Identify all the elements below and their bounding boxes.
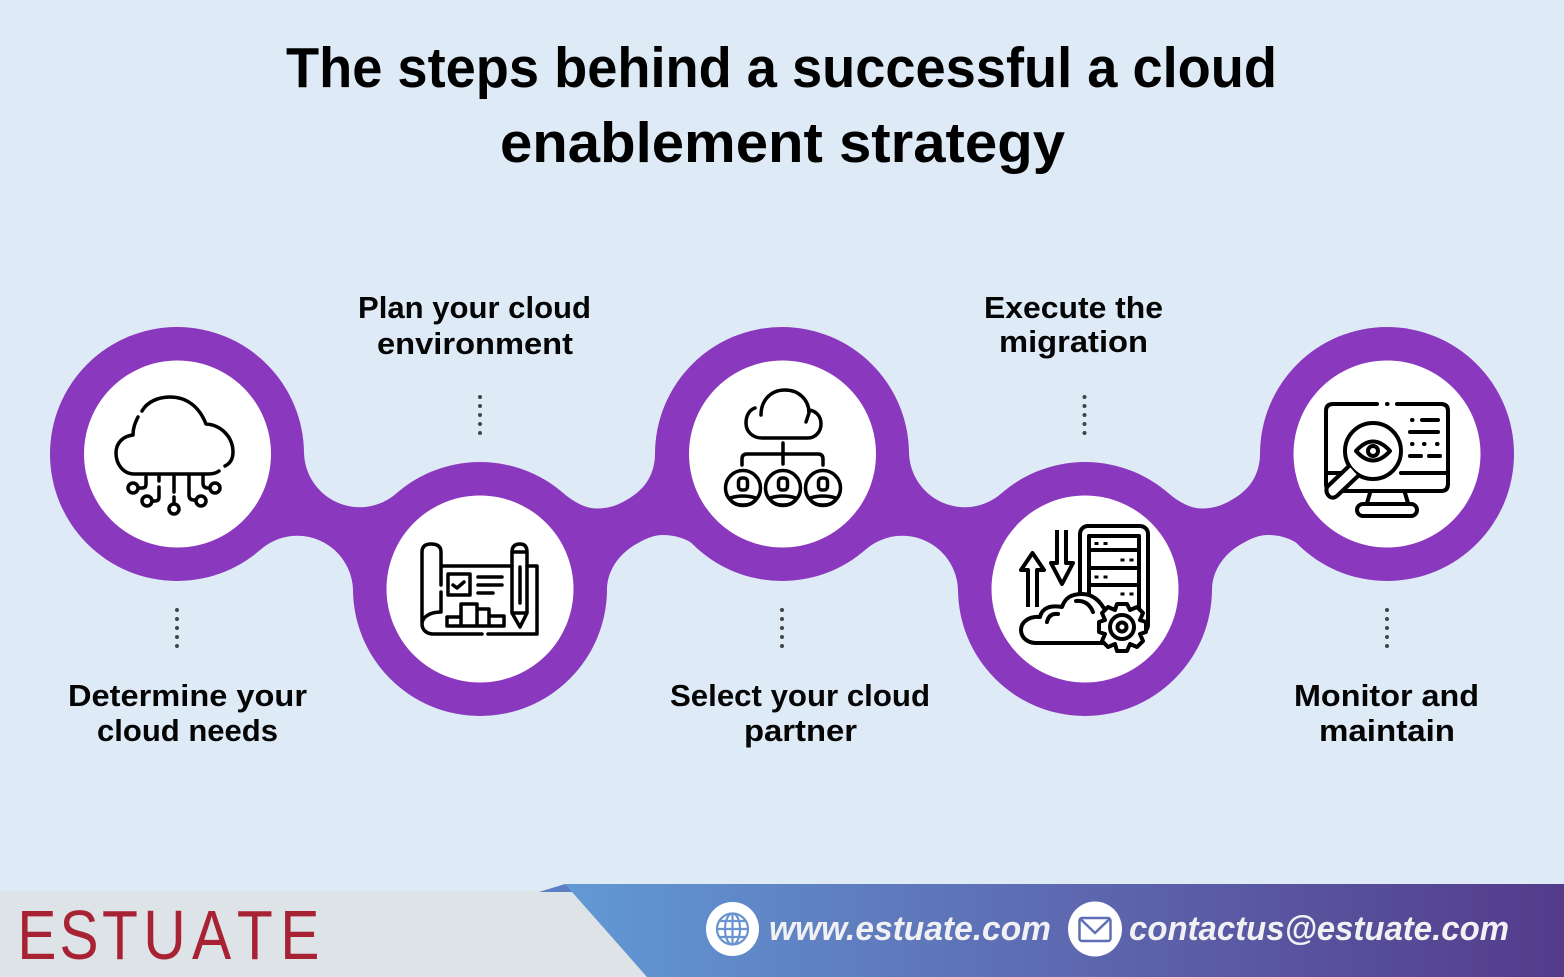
footer gradient contact banner [565, 884, 1564, 977]
dotted leader: step 2 [478, 395, 482, 435]
title: enablement strategy [500, 111, 1065, 175]
label: determine your cloud needs: cloud needs [97, 713, 278, 748]
label: select your cloud partner [670, 678, 930, 748]
label: plan your cloud environment [358, 290, 591, 361]
icon: envelope [1068, 902, 1122, 956]
footer [0, 884, 1564, 977]
step 2 white disc [386, 496, 574, 682]
icon: cloud linked to three people [726, 390, 840, 506]
label: monitor and maintain [1294, 678, 1479, 748]
dotted leader: step 4 [1082, 395, 1086, 435]
step 4 white disc [992, 496, 1178, 682]
label: execute the migration [984, 290, 1163, 359]
logo wordmark: ESTUATE [17, 895, 320, 974]
icon: blueprint plan with pencil [422, 544, 537, 634]
step 3 white disc [689, 360, 876, 548]
icon: cloud with circuit nodes [116, 397, 233, 514]
label: determine your cloud needs: Determine your [68, 678, 307, 713]
icon: server, transfer arrows, cloud and gear [1021, 526, 1148, 651]
label: select your cloud partner: Select your cloud [670, 678, 930, 713]
footer grey logo strip [0, 891, 660, 977]
dotted leader: step 1 [175, 608, 179, 648]
dotted leader: step 3 [780, 608, 784, 648]
step 1 white disc [84, 360, 271, 548]
label: execute the migration: Execute the [984, 290, 1163, 325]
dotted leader: step 5 [1385, 608, 1389, 648]
website address: www.estuate.com [769, 910, 1051, 948]
email address: contactus@estuate.com [1129, 910, 1509, 948]
icon: globe [706, 902, 759, 956]
label: determine your cloud needs [68, 678, 307, 748]
label: monitor and maintain: Monitor and [1294, 678, 1479, 713]
label: execute the migration: migration [999, 324, 1148, 359]
purple winding process band [50, 327, 1514, 716]
title: The steps behind a successful a cloud [286, 36, 1277, 100]
title [286, 36, 1277, 175]
label: plan your cloud environment: environment [377, 326, 573, 361]
step 5 white disc [1294, 360, 1480, 548]
label: plan your cloud environment: Plan your cloud [358, 290, 591, 325]
icon: monitor with magnifier and eye [1326, 404, 1448, 516]
footer fold accent [539, 884, 573, 892]
label: monitor and maintain: maintain [1319, 713, 1455, 748]
label: select your cloud partner: partner [744, 713, 857, 748]
